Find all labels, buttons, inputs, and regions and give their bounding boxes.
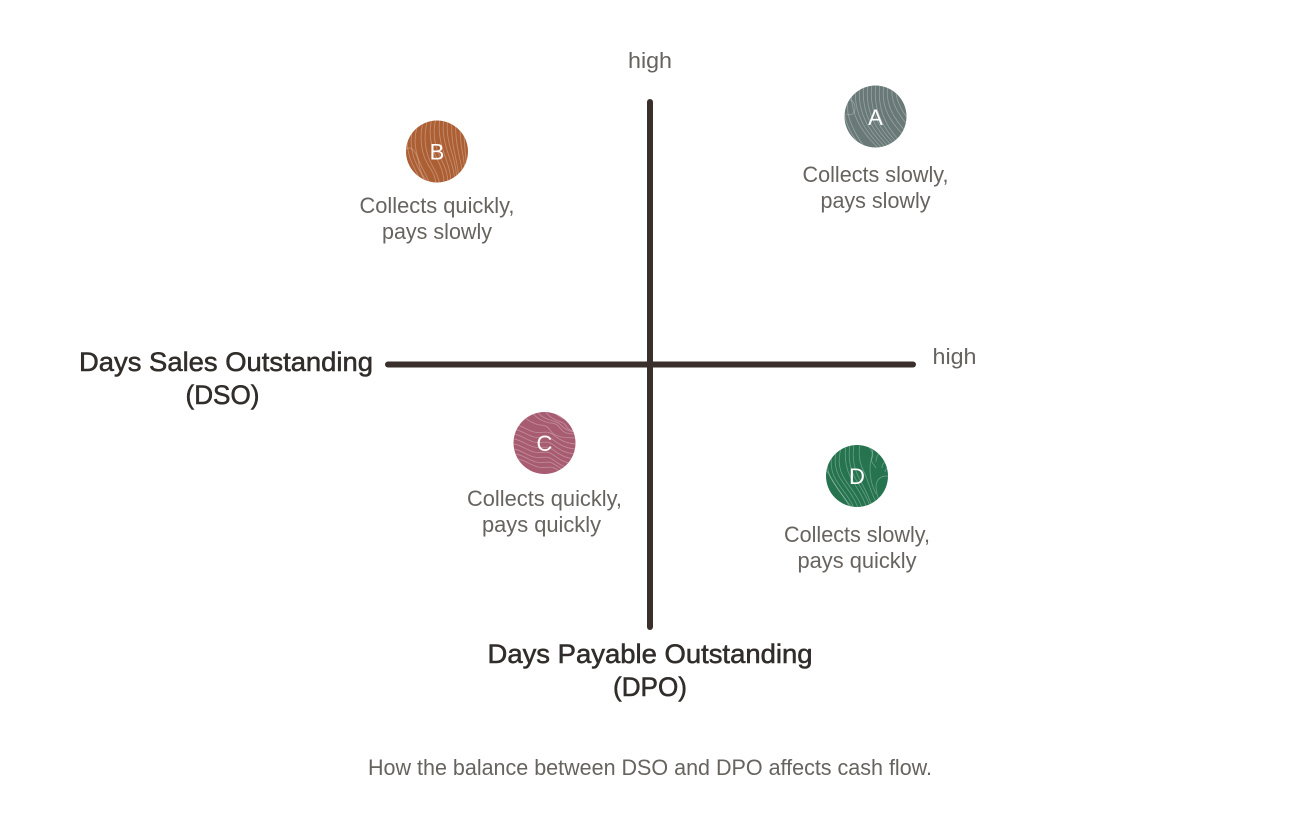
vertical axis high label: high: [628, 48, 672, 73]
icon: badge A: A: [868, 105, 883, 130]
quadrant D description: Collects slowly,: [784, 522, 930, 547]
icon: badge C: C: [537, 431, 553, 456]
quadrant B description: pays slowly: [382, 219, 492, 244]
quadrant C description: [467, 486, 622, 537]
icon: badge B: B: [430, 140, 444, 164]
icon: badge D: [826, 445, 888, 507]
quadrant A: collects slowly, pays slowly: [802, 84, 948, 213]
quadrant B description: [360, 193, 514, 244]
horizontal axis: DSO: [388, 362, 913, 368]
icon: badge A: [844, 86, 906, 148]
DSO axis title: [79, 347, 373, 410]
quadrant A description: pays slowly: [820, 188, 930, 213]
quadrant C description: Collects quickly,: [467, 486, 622, 511]
quadrant A description: Collects slowly,: [802, 162, 948, 187]
quadrant B description: Collects quickly,: [360, 193, 514, 218]
horizontal axis high label: high: [932, 344, 976, 369]
DSO axis title: Days Sales Outstanding: [79, 347, 373, 377]
quadrant B: collects quickly, pays slowly: [360, 118, 514, 244]
icon: badge B: [406, 120, 468, 182]
icon: badge D: D: [849, 464, 865, 489]
DPO axis title: (DPO): [613, 672, 687, 702]
DSO axis title: (DSO): [186, 380, 260, 410]
quadrant C description: pays quickly: [482, 512, 601, 537]
quadrant A description: [802, 162, 948, 213]
icon: badge C: [514, 412, 576, 474]
caption: How the balance between DSO and DPO affects cash flow.: [368, 755, 932, 780]
quadrant D description: [784, 522, 930, 573]
DPO axis title: [488, 639, 812, 702]
quadrant C: collects quickly, pays quickly: [467, 410, 622, 537]
quadrant D: collects slowly, pays quickly: [784, 436, 930, 573]
vertical axis: DPO: [647, 102, 653, 627]
DPO axis title: Days Payable Outstanding: [488, 639, 812, 669]
quadrant D description: pays quickly: [798, 548, 916, 573]
